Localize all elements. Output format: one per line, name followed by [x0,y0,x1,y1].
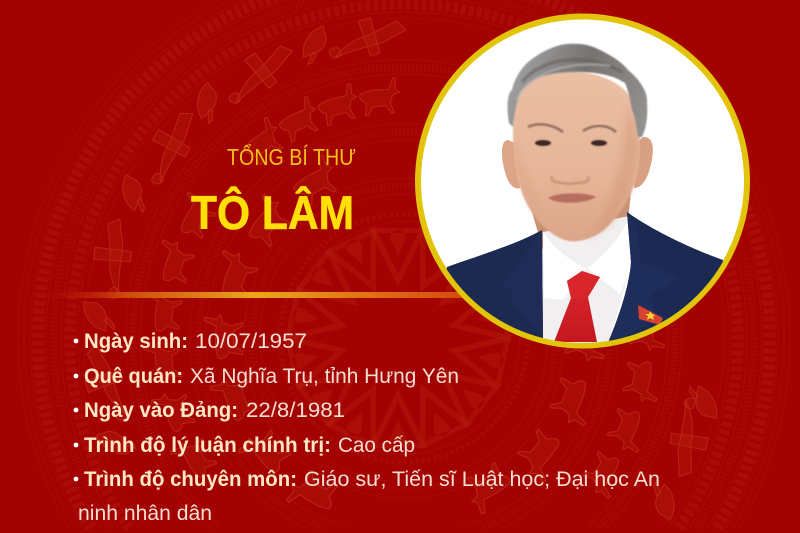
mouth [548,193,596,203]
gradient divider [40,292,470,298]
row: hometown: Quê quán: [84,365,183,388]
row: date of birth [74,330,307,353]
ears [502,140,520,188]
row: hometown [74,365,459,388]
row: party admission date: 22/8/1981 [246,399,345,422]
row: party admission date [74,399,345,422]
row: date of birth: 10/07/1957 [195,330,307,353]
pin [638,305,663,325]
suit [440,230,543,340]
heading: role: TỔNG BÍ THƯ [227,143,356,170]
bio list [74,330,660,525]
nose [552,176,588,184]
heading: name: TÔ LÂM [191,186,354,239]
shirt [543,216,632,345]
row: political theory level: Trình độ lý luận chính trị: [84,434,331,457]
portrait [418,16,747,346]
eyebrows [528,124,563,132]
row: professional qualification: ninh nhân dân [78,502,212,525]
row: political theory level: Cao cấp [338,434,415,457]
row: hometown: Xã Nghĩa Trụ, tỉnh Hưng Yên [190,365,459,388]
row: professional qualification [74,468,660,525]
tie [554,271,600,342]
row: date of birth: Ngày sinh: [84,330,188,353]
neck [532,190,631,250]
row: professional qualification: Giáo sư, Tiến sĩ Luật học; Đại học An [304,468,660,491]
hair [508,44,647,137]
eyes [535,140,551,146]
face [513,71,640,241]
row: professional qualification: Trình độ chuyên môn: [84,468,297,491]
row: party admission date: Ngày vào Đảng: [84,399,238,422]
